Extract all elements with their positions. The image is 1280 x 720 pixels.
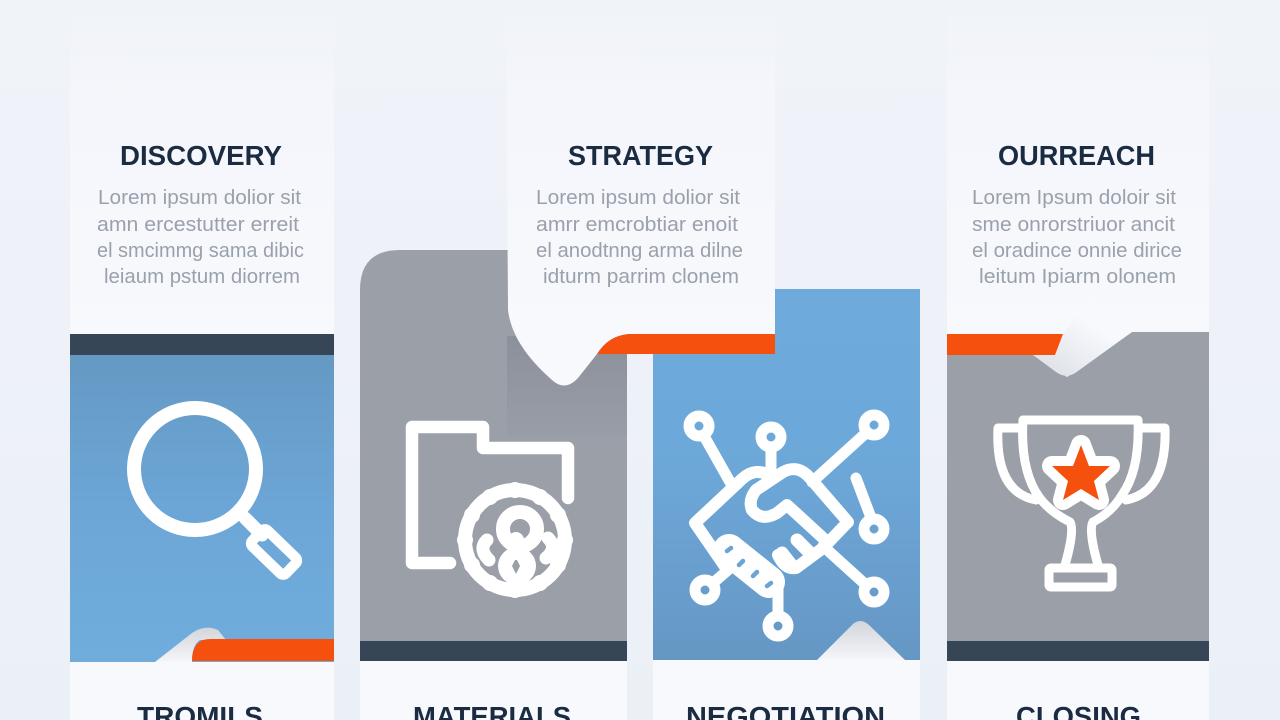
outreach peel — [1033, 298, 1132, 376]
materials dark bar — [360, 641, 627, 661]
negotiation peel — [817, 621, 905, 660]
panel: outreach — [947, 0, 1209, 720]
discovery body text: el smcimmg sama dibic — [97, 240, 304, 262]
discovery orange tab — [192, 639, 334, 661]
discovery body text — [97, 187, 304, 288]
materials bottom card — [360, 661, 627, 720]
outreach body text: Lorem Ipsum doloir sit — [972, 187, 1176, 209]
trials bottom card — [70, 662, 334, 720]
icon: handshake network — [689, 415, 884, 636]
materials shaded block — [507, 336, 627, 436]
panel: discovery — [70, 0, 334, 662]
negotiation bottom card — [653, 660, 920, 720]
strategy body text: amrr emcrobtiar enoit — [536, 214, 738, 236]
outreach card — [947, 0, 1209, 334]
icon: trophy with star — [998, 420, 1165, 587]
outreach body text: sme onrorstriuor ancit — [972, 214, 1175, 236]
strategy heading: STRATEGY — [568, 140, 713, 171]
outreach body text — [972, 187, 1182, 288]
discovery heading: DISCOVERY — [120, 140, 282, 171]
discovery blue panel — [70, 355, 334, 662]
outreach body text: el oradince onnie dirice — [972, 240, 1182, 262]
discovery body text: leiaum pstum diorrem — [104, 266, 300, 288]
strategy orange tab — [597, 334, 775, 354]
closing gray panel — [947, 332, 1209, 641]
closing bottom card — [947, 661, 1209, 720]
outreach body text: leitum Ipiarm olonem — [979, 266, 1176, 288]
panel: materials — [360, 250, 627, 720]
panel: strategy — [506, 0, 775, 386]
strategy body text: el anodtnng arma dilne — [536, 240, 743, 262]
strategy card — [506, 0, 775, 386]
icon: magnifying glass — [134, 408, 299, 576]
discovery body text: Lorem ipsum dolior sit — [98, 187, 301, 209]
outreach orange tab — [947, 334, 1063, 355]
discovery body text: amn ercestutter erreit — [97, 214, 299, 236]
negotiation blue panel — [653, 289, 920, 660]
strategy body text — [536, 187, 743, 288]
closing dark bar — [947, 641, 1209, 661]
icon: folder with gear — [412, 427, 573, 598]
discovery peel — [155, 628, 226, 662]
discovery dark bar — [70, 334, 334, 355]
strategy body text: Lorem ipsum dolior sit — [536, 187, 740, 209]
discovery card — [70, 0, 334, 334]
panel: negotiation — [653, 289, 920, 720]
strategy body text: idturm parrim clonem — [543, 266, 739, 288]
outreach heading: OURREACH — [998, 140, 1155, 171]
materials gray panel — [360, 250, 627, 641]
